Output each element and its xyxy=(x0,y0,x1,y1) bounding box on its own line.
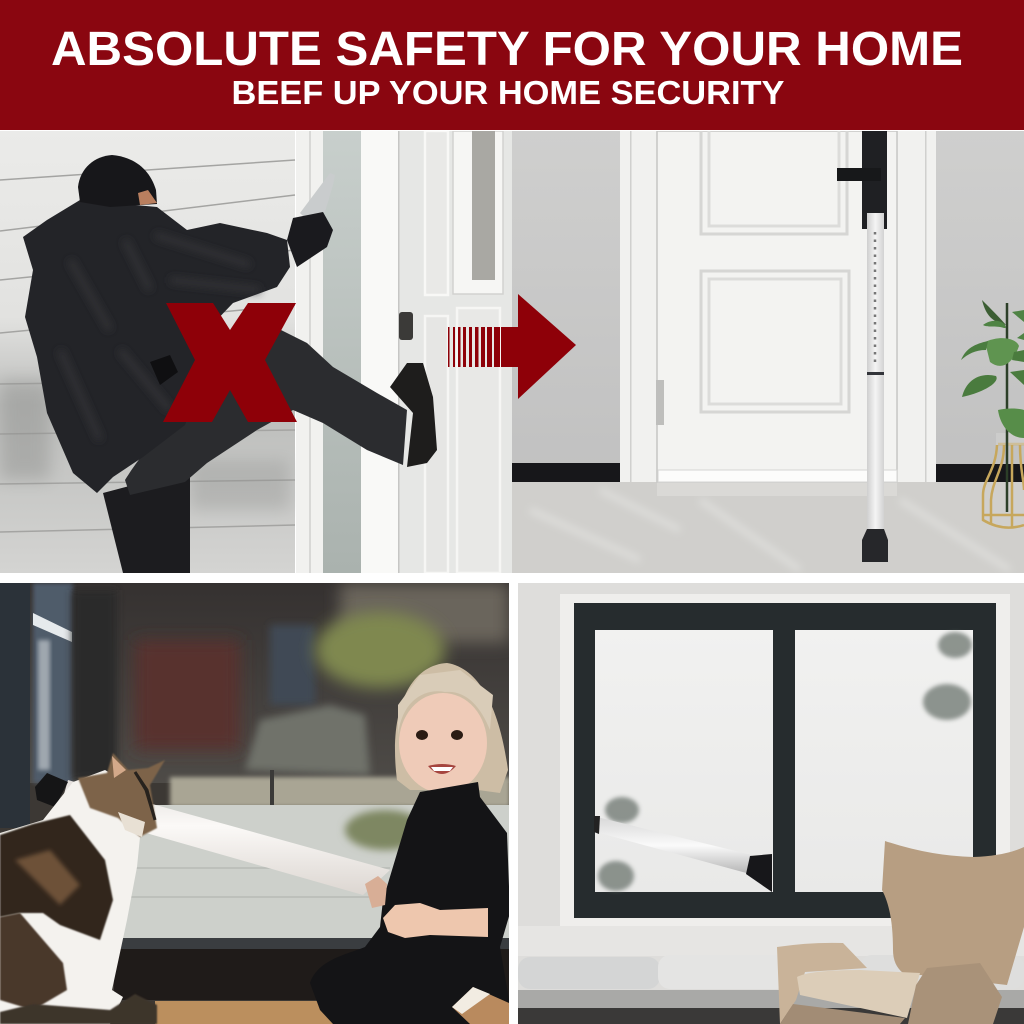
left glass xyxy=(595,630,773,892)
right glass xyxy=(795,630,973,892)
security bar xyxy=(837,131,888,562)
burglar figure xyxy=(23,155,437,573)
black window frame xyxy=(574,603,996,918)
armchair xyxy=(777,841,1024,1024)
window bench with cushions xyxy=(518,955,1024,1024)
security bar xyxy=(594,816,772,892)
title: ABSOLUTE SAFETY FOR YOUR HOME xyxy=(51,22,963,76)
panel: door with security bar xyxy=(512,128,1024,573)
subtitle: BEEF UP YOUR HOME SECURITY xyxy=(232,74,784,111)
floor xyxy=(512,463,1024,573)
child xyxy=(310,663,510,1024)
mask xyxy=(78,155,157,207)
arrow: striped right arrow xyxy=(448,294,576,399)
potted plant xyxy=(961,300,1024,528)
jacket xyxy=(23,200,290,493)
window view xyxy=(30,583,510,940)
glove xyxy=(287,212,333,267)
panel: burglar kicking door xyxy=(0,131,512,573)
kicking leg xyxy=(125,330,407,495)
boot xyxy=(390,363,437,467)
standing leg xyxy=(103,470,190,573)
window frame xyxy=(0,583,509,1024)
lower wall xyxy=(518,926,1024,956)
siding wall xyxy=(0,131,361,573)
security bar xyxy=(35,773,390,895)
X mark xyxy=(163,303,297,422)
header banner xyxy=(0,0,1024,130)
wall trim xyxy=(560,594,1010,926)
cat xyxy=(0,753,165,1024)
white door xyxy=(398,131,512,573)
door frame and door xyxy=(620,128,936,482)
panel: child and cat at sliding door xyxy=(0,583,510,1024)
blurred tree outside xyxy=(598,632,972,891)
panel: window with security bar xyxy=(518,583,1024,1024)
gun xyxy=(300,182,323,216)
